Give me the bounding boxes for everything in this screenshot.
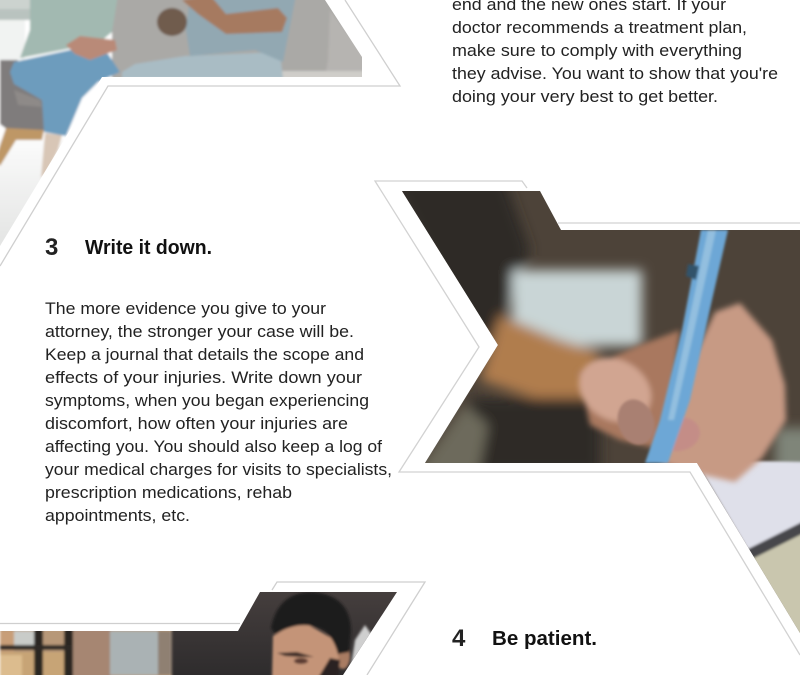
step number 4: 4 (452, 625, 466, 652)
step number 3: 3 (45, 234, 58, 261)
text block: step 2 continued (452, 0, 778, 106)
photo: man in office (0, 588, 405, 675)
photo: patient and doctor on sofa (0, 0, 375, 255)
text block: step 2 continued: make sure to comply with everything (452, 41, 742, 60)
photo: hand writing with blue pen (390, 180, 800, 645)
text block: step 3 body (45, 299, 392, 525)
text block: step 3 body: attorney, the stronger your case will be. (45, 322, 354, 341)
text block: step 3 body: effects of your injuries. Write down your (45, 368, 362, 387)
text block: step 3 body: symptoms, when you began experiencing (45, 391, 369, 410)
text block: step 2 continued: doctor recommends a treatment plan, (452, 18, 747, 37)
outline: frame around third photo (0, 582, 425, 675)
text block: step 3 body: your medical charges for visits to specialists, (45, 460, 392, 479)
text block: step 3 body: appointments, etc. (45, 506, 190, 525)
step title: Be patient. (492, 628, 597, 650)
step title: Write it down. (85, 237, 212, 259)
heading: step 4 (452, 625, 597, 652)
text block: step 3 body: prescription medications, rehab (45, 483, 292, 502)
text block: step 2 continued: they advise. You want to show that you're (452, 64, 778, 83)
outline: frame around second photo (375, 181, 800, 655)
text block: step 3 body: Keep a journal that details the scope and (45, 345, 364, 364)
text block: step 3 body: The more evidence you give to your (45, 299, 326, 318)
text block: step 3 body: affecting you. You should also keep a log of (45, 437, 382, 456)
text block: step 3 body: discomfort, how often your injuries are (45, 414, 348, 433)
heading: step 3 (45, 234, 212, 261)
outline: frame around first photo (0, 0, 400, 266)
text block: step 2 continued: doing your very best to get better. (452, 87, 718, 106)
